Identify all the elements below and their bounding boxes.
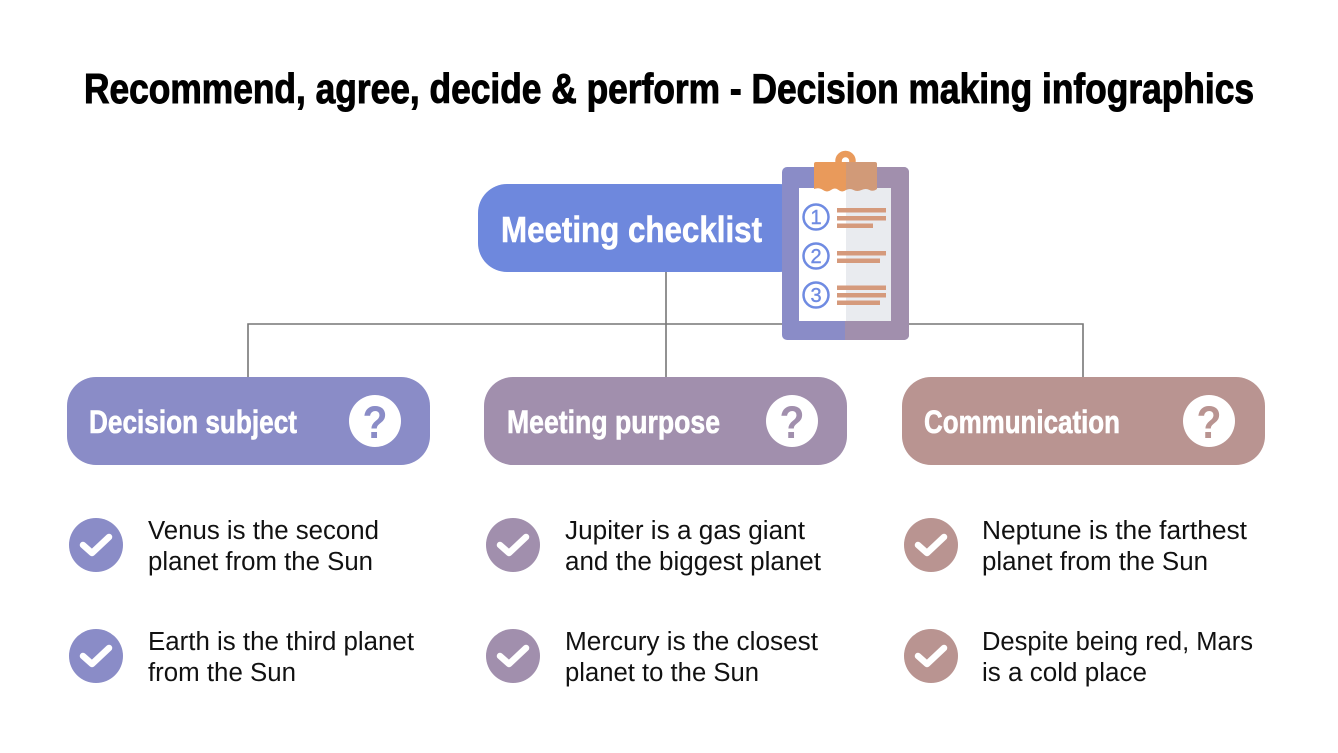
heading: communication xyxy=(902,377,1265,465)
item: earth xyxy=(69,628,414,687)
item: mars: is a cold place xyxy=(982,659,1147,687)
icon: clipboard checklist: 3 xyxy=(810,285,822,307)
item: earth: from the Sun xyxy=(148,659,296,687)
item: venus xyxy=(69,517,379,576)
item: mercury: Mercury is the closest xyxy=(565,628,818,656)
icon: clipboard checklist xyxy=(782,154,909,340)
item: neptune xyxy=(904,517,1247,576)
item: jupiter: Jupiter is a gas giant xyxy=(565,517,805,545)
panel: communication xyxy=(902,377,1265,687)
heading: meeting purpose: ? xyxy=(780,397,804,448)
heading: decision subject xyxy=(67,377,430,465)
heading: meeting purpose: Meeting purpose xyxy=(507,404,720,440)
item: neptune: Neptune is the farthest xyxy=(982,517,1247,545)
item: mercury: planet to the Sun xyxy=(565,659,759,687)
connector lines xyxy=(248,272,1083,377)
heading pill: meeting checklist xyxy=(478,184,808,272)
item: mars: Despite being red, Mars xyxy=(982,628,1253,656)
heading: decision subject: ? xyxy=(362,397,388,448)
icon: clipboard checklist: 1 xyxy=(810,207,822,229)
icon: clipboard checklist: 2 xyxy=(810,246,822,268)
item: mercury xyxy=(486,628,818,687)
heading: decision subject: Decision subject xyxy=(89,404,297,440)
item: earth: Earth is the third planet xyxy=(148,628,414,656)
item: mars xyxy=(904,628,1253,687)
item: neptune: planet from the Sun xyxy=(982,548,1208,576)
heading: meeting purpose xyxy=(484,377,847,465)
heading: communication: ? xyxy=(1196,397,1222,448)
panel: meeting purpose xyxy=(484,377,847,687)
item: venus: planet from the Sun xyxy=(148,548,373,576)
panel: decision subject xyxy=(67,377,430,687)
heading pill: meeting checklist: Meeting checklist xyxy=(501,209,762,250)
item: jupiter xyxy=(486,517,821,576)
heading: communication: Communication xyxy=(924,404,1120,440)
item: jupiter: and the biggest planet xyxy=(565,548,821,576)
item: venus: Venus is the second xyxy=(148,517,379,545)
